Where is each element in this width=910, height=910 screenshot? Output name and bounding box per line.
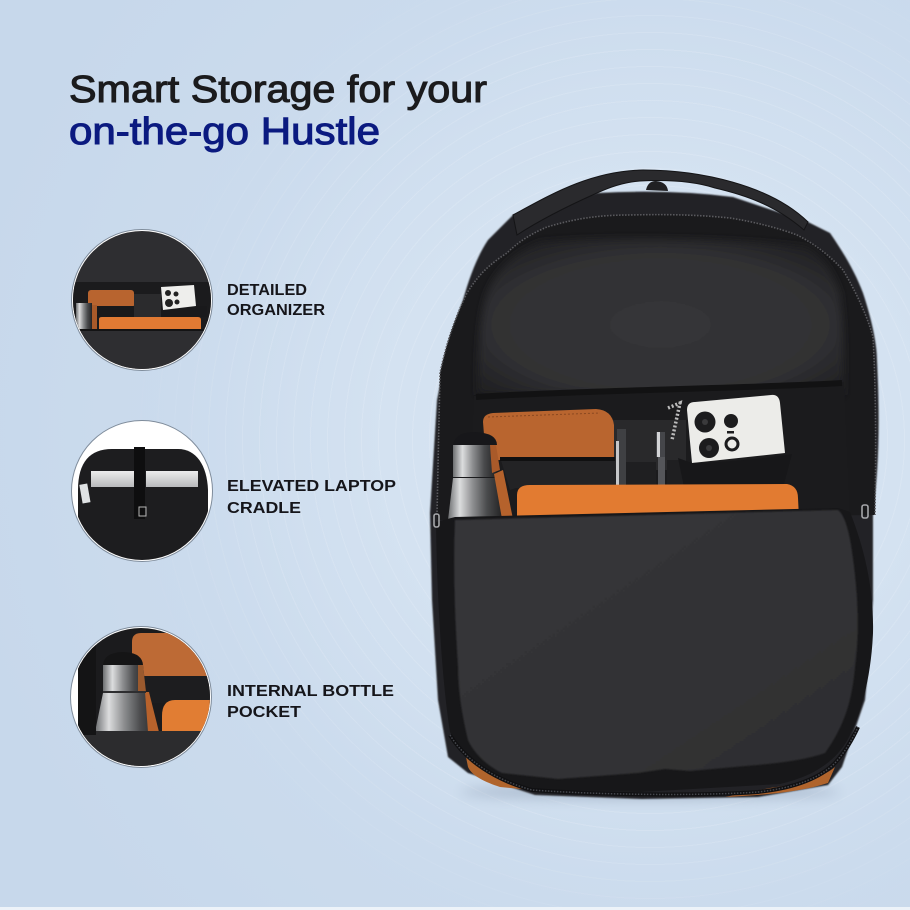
front flap binding (436, 508, 873, 792)
feature: elevated laptop cradle (72, 420, 396, 565)
title (69, 69, 487, 153)
title: Smart Storage for your (69, 69, 487, 111)
organizer: zipper pull (668, 403, 680, 440)
title: on-the-go Hustle (69, 111, 380, 153)
icon: bottle pocket close-up circle (70, 626, 214, 770)
organizer rim (476, 383, 842, 397)
label: elevated laptop cradle: ELEVATED LAPTOP (227, 478, 396, 495)
backpack outer shell (430, 192, 879, 799)
organizer back panel (468, 382, 850, 512)
zipper teeth (437, 215, 876, 515)
steel bottle (448, 432, 513, 520)
organizer: wallet pocket (500, 457, 616, 490)
label: internal bottle pocket (227, 683, 394, 721)
backpack interior lining (477, 239, 844, 395)
icon: organizer close-up circle (70, 230, 214, 370)
label: detailed organizer: DETAILED (227, 282, 307, 299)
label: elevated laptop cradle (227, 478, 396, 517)
organizer: pens (616, 429, 665, 487)
label: detailed organizer: ORGANIZER (227, 302, 325, 319)
zipper pulls (434, 505, 868, 527)
organizer: white phone (687, 395, 785, 463)
handle loop knob (646, 181, 668, 191)
icon: laptop cradle close-up circle (72, 420, 212, 565)
backpack shadow (460, 784, 840, 800)
feature: internal bottle pocket (70, 626, 394, 770)
label: detailed organizer (227, 282, 325, 319)
bottom zipper (450, 727, 858, 794)
organizer: phone pocket (678, 454, 792, 487)
front flap interior (454, 510, 858, 779)
zipper opening (437, 215, 876, 520)
organizer centre wall (612, 420, 686, 470)
backpack photo (430, 170, 879, 800)
backpack handle (513, 170, 808, 235)
label: internal bottle pocket: INTERNAL BOTTLE (227, 683, 394, 700)
organizer: middle pocket (626, 460, 686, 488)
feature: detailed organizer (70, 230, 325, 370)
tan leather base (465, 752, 835, 797)
organizer: brown wallet (483, 409, 614, 460)
orange notebook (517, 484, 799, 518)
label: elevated laptop cradle: CRADLE (227, 500, 301, 517)
label: internal bottle pocket: POCKET (227, 704, 301, 721)
